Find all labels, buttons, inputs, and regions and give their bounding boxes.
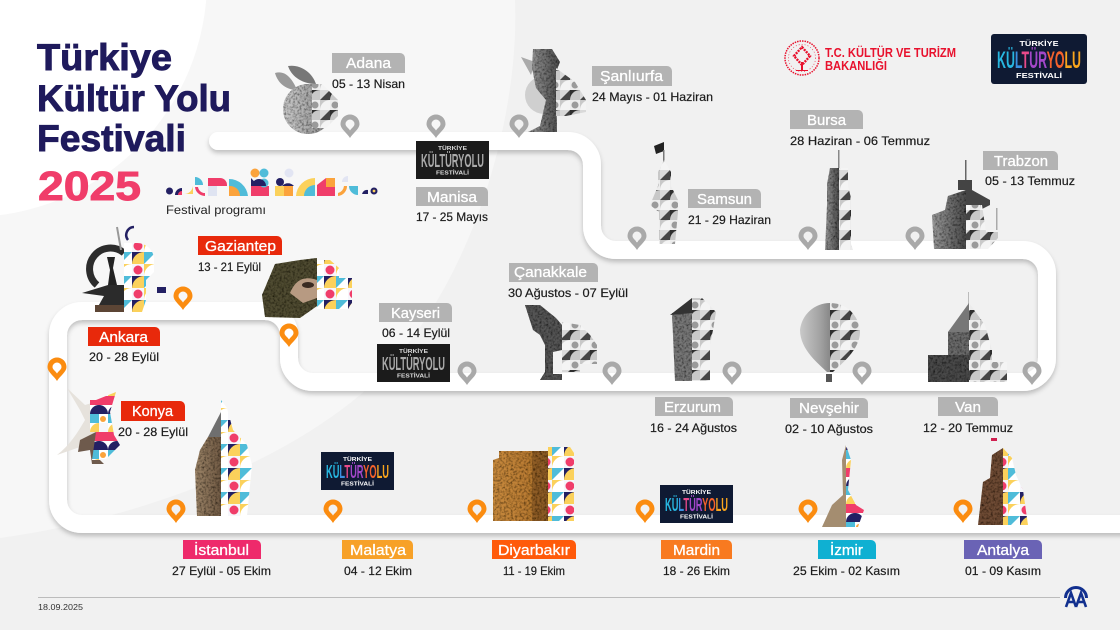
illustration: Erzurum tower	[670, 298, 716, 381]
label: Nevşehir	[785, 398, 873, 436]
illustration: Samsun tower	[650, 142, 678, 244]
label: Van: 12 - 20 Temmuz	[923, 421, 1013, 435]
badge: Manisa logo: TÜRKİYE	[438, 145, 467, 152]
label: Samsun	[688, 189, 771, 227]
text: Festival programı: Festival programı	[166, 203, 266, 217]
badge: Malatya logo	[321, 452, 394, 490]
label: Adana	[332, 53, 405, 91]
label: Malatya	[342, 540, 413, 578]
ministry logo	[785, 41, 956, 75]
illustration: Trabzon building	[932, 160, 998, 249]
illustration: Şanlıurfa	[521, 49, 586, 132]
label: Diyarbakır: Diyarbakır	[498, 542, 570, 559]
label: Manisa: 17 - 25 Mayıs	[416, 210, 488, 224]
label: Çanakkale: 30 Ağustos - 07 Eylül	[508, 286, 628, 300]
label: Van: Van	[955, 399, 981, 416]
label: Mardin: Mardin	[673, 542, 720, 559]
label: Samsun: 21 - 29 Haziran	[688, 213, 771, 227]
illustration: Konya dervish	[57, 388, 120, 464]
festival logo: top right: KÜLTÜRYOLU	[997, 47, 1081, 74]
ministry logo: T.C. KÜLTÜR VE TURİZM	[825, 45, 956, 60]
badge: Mardin logo: KÜLTÜRYOLU	[665, 495, 728, 515]
label: Erzurum	[650, 397, 737, 435]
label: Trabzon: Trabzon	[994, 153, 1048, 170]
label: Erzurum: 16 - 24 Ağustos	[650, 421, 737, 435]
badge: Kayseri logo: KÜLTÜRYOLU	[382, 354, 445, 374]
badge: Malatya logo: KÜLTÜRYOLU	[326, 462, 389, 482]
label: Nevşehir: Nevşehir	[799, 400, 859, 417]
label: Trabzon	[983, 151, 1075, 188]
title: Kültür Yolu	[37, 78, 231, 119]
label: Manisa: Manisa	[427, 189, 478, 206]
decorative festival programme strip	[166, 168, 378, 196]
label: Gaziantep: 13 - 21 Eylül	[198, 260, 261, 274]
label: Mardin: 18 - 26 Ekim	[663, 564, 730, 578]
label: Manisa	[416, 187, 488, 224]
badge: Kayseri logo	[377, 344, 450, 382]
label: Antalya: 01 - 09 Kasım	[965, 564, 1041, 578]
label: İstanbul	[172, 540, 271, 578]
badge: Kayseri logo: TÜRKİYE	[399, 348, 428, 355]
badge: Kayseri logo: FESTİVALİ	[397, 372, 431, 380]
label: Erzurum: Erzurum	[664, 399, 721, 416]
footer line	[38, 597, 1060, 598]
icon: AA logo	[1066, 588, 1086, 607]
label: Malatya: 04 - 12 Ekim	[344, 564, 412, 578]
label: Mardin	[661, 540, 732, 578]
label: İzmir: 25 Ekim - 02 Kasım	[793, 564, 900, 578]
illustration: Ankara monument	[82, 227, 166, 312]
badge: Malatya logo: TÜRKİYE	[343, 456, 372, 463]
illustration: Nevşehir balloon	[800, 303, 860, 382]
label: Şanlıurfa: 24 Mayıs - 01 Haziran	[592, 90, 713, 104]
label: İstanbul: İstanbul	[194, 541, 249, 559]
title: Festivali	[37, 118, 186, 159]
label: Diyarbakır: 11 - 19 Ekim	[503, 564, 565, 578]
label: Şanlıurfa: Şanlıurfa	[600, 68, 664, 85]
badge: Manisa logo: KÜLTÜRYOLU	[421, 151, 484, 171]
label: Çanakkale: Çanakkale	[514, 264, 587, 281]
badge: Manisa logo	[416, 141, 489, 179]
label: Adana: Adana	[346, 55, 392, 72]
label: Van	[923, 397, 1013, 435]
label: Malatya: Malatya	[350, 542, 407, 559]
title	[37, 37, 231, 209]
label: Bursa: Bursa	[807, 112, 847, 129]
illustration: İzmir clock tower	[822, 445, 864, 527]
illustration: Gaziantep mosaic	[262, 258, 352, 318]
label: Konya	[118, 401, 188, 439]
label: Konya: 20 - 28 Eylül	[118, 425, 188, 439]
label: İzmir	[793, 540, 900, 578]
label: Gaziantep	[198, 236, 282, 274]
label: Adana: 05 - 13 Nisan	[332, 77, 405, 91]
label: Ankara	[88, 327, 160, 364]
label: Ankara: Ankara	[99, 329, 149, 346]
title: 2025	[38, 163, 141, 209]
label: Antalya	[964, 540, 1042, 578]
label: Nevşehir: 02 - 10 Ağustos	[785, 422, 873, 436]
ministry logo: BAKANLIĞI	[825, 58, 887, 73]
label: Kayseri	[379, 303, 452, 340]
illustration: Antalya tower	[978, 438, 1028, 525]
route road	[58, 141, 1120, 524]
label: Diyarbakır	[492, 540, 576, 578]
label: Şanlıurfa	[592, 66, 713, 104]
label: İzmir: İzmir	[830, 541, 863, 559]
label: Gaziantep: Gaziantep	[205, 238, 276, 255]
festival logo: top right: TÜRKİYE	[1020, 39, 1058, 48]
label: Kayseri: Kayseri	[391, 305, 440, 322]
festival logo: top right: FESTİVALİ	[1016, 71, 1062, 80]
label: İstanbul: 27 Eylül - 05 Ekim	[172, 564, 271, 578]
illustration: Adana orange	[275, 66, 338, 134]
label: Antalya: Antalya	[977, 542, 1030, 559]
festival logo: top right	[991, 34, 1087, 84]
badge: Manisa logo: FESTİVALİ	[436, 170, 470, 176]
badge: Mardin logo	[660, 485, 733, 523]
label: Ankara: 20 - 28 Eylül	[89, 350, 159, 364]
pins: gray (past events)	[340, 114, 1042, 385]
illustration: Diyarbakır walls	[493, 447, 574, 521]
badge: Mardin logo: FESTİVALİ	[680, 514, 714, 520]
label: Konya: Konya	[132, 403, 174, 420]
pins: orange (upcoming events)	[48, 286, 972, 523]
label: Çanakkale	[508, 263, 628, 300]
illustration: Bursa tower	[825, 150, 853, 250]
illustration: Çanakkale horse	[525, 305, 597, 380]
title: Türkiye	[37, 37, 172, 78]
label: Kayseri: 06 - 14 Eylül	[382, 326, 450, 340]
label: Samsun: Samsun	[697, 191, 752, 208]
label: Bursa	[790, 110, 930, 148]
badge: Mardin logo: TÜRKİYE	[682, 489, 711, 496]
badge: Malatya logo: FESTİVALİ	[341, 480, 375, 488]
label: Trabzon: 05 - 13 Temmuz	[985, 174, 1075, 188]
illustration: İstanbul Galata tower	[195, 400, 252, 516]
text: date: 18.09.2025	[38, 602, 83, 612]
illustration: Van church	[928, 292, 1007, 382]
label: Bursa: 28 Haziran - 06 Temmuz	[790, 134, 930, 148]
